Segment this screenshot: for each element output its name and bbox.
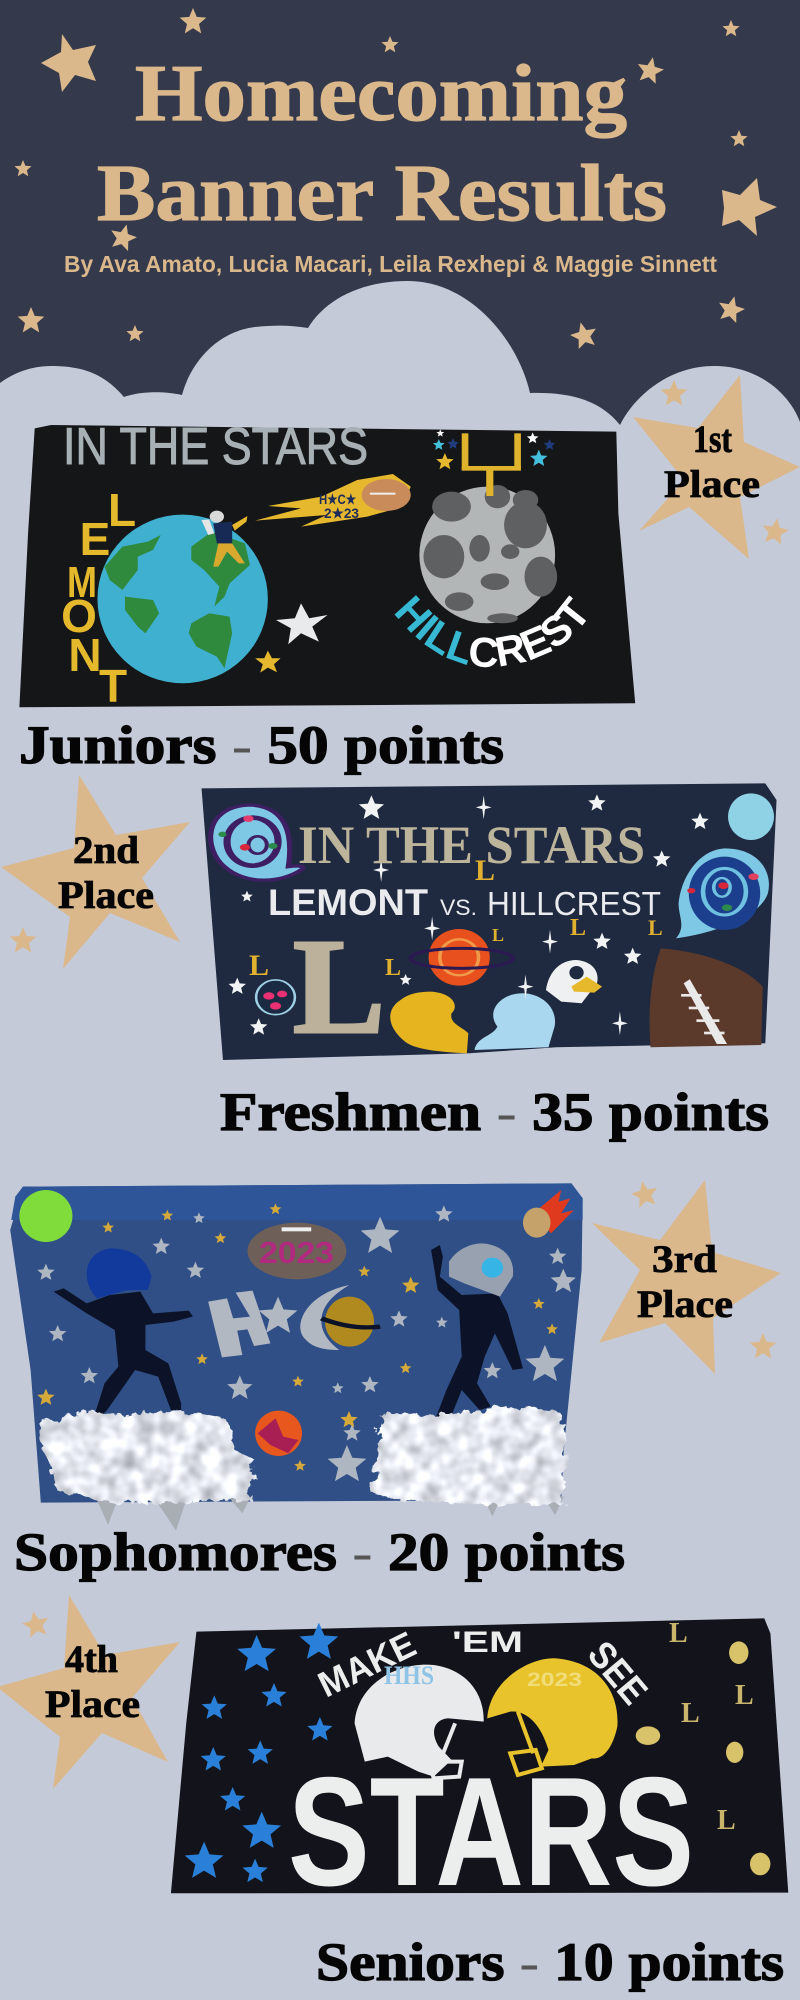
heading: freshmen: Freshmen - 35 points (220, 1082, 769, 1142)
1st place badge: Place (664, 463, 760, 506)
hillcrest curved text (393, 612, 590, 667)
lemont letters: L (108, 484, 136, 536)
goal post (462, 433, 521, 496)
small gold L marks: L (475, 854, 495, 887)
right planet (728, 793, 774, 840)
small gold L marks: L (249, 949, 269, 982)
astronaut player (202, 511, 247, 567)
small gold L marks (249, 854, 663, 982)
banner: juniors: HILLCREST (394, 595, 586, 668)
lemont letters (61, 484, 136, 712)
3rd place badge: 3rd (652, 1238, 717, 1281)
4th place badge: Place (45, 1683, 140, 1726)
lemont letters: N (68, 629, 102, 681)
white stars (229, 794, 709, 1035)
lemont letters: T (99, 660, 127, 712)
laces (282, 1227, 311, 1231)
2nd place badge: 2nd (73, 829, 139, 872)
small gold L marks: L (570, 915, 586, 941)
banner: seniors (171, 1618, 788, 1918)
left player (54, 1248, 193, 1427)
cotton drips (97, 1497, 564, 1531)
comet text: H★C★ (319, 491, 356, 507)
gold L marks: L (717, 1805, 736, 1836)
4th place badge (0, 1595, 180, 1789)
banner: juniors (19, 418, 636, 712)
football corner (650, 948, 763, 1047)
banner: sophomores (10, 1183, 583, 1531)
white helmet (355, 1665, 484, 1778)
2nd place badge (1, 775, 190, 969)
HC logo (208, 1285, 349, 1357)
helmet labels: 2023 (527, 1670, 582, 1691)
right cotton cloud (372, 1408, 566, 1505)
1st place badge: 1st (693, 418, 732, 461)
left galaxy (211, 805, 303, 880)
matchup text: VS. (440, 895, 477, 920)
helmet labels: HHS (384, 1661, 434, 1690)
heading: juniors: Juniors - 50 points (19, 715, 504, 775)
matchup text: HILLCREST (487, 885, 661, 922)
lemont letters: O (61, 590, 97, 642)
heading: seniors: Seniors - 10 points (316, 1932, 784, 1992)
banner slogan: IN THE STARS (63, 418, 368, 476)
lemont letters: M (67, 558, 97, 607)
3rd place badge: Place (637, 1283, 733, 1326)
title (97, 50, 667, 238)
heading: sophomores: Sophomores - 20 points (14, 1522, 625, 1582)
blue helmet (474, 993, 555, 1050)
blue stars (185, 1623, 338, 1882)
ringed planet (321, 1297, 380, 1347)
slogan: make 'em see: MAKE (312, 1623, 422, 1705)
matchup text (268, 882, 661, 923)
stars wordmark: STARS (288, 1745, 694, 1918)
small gold L marks: L (385, 955, 401, 981)
byline: By Ava Amato, Lucia Macari, Leila Rexhepi & Maggie Sinnett (64, 251, 717, 277)
slogan: make 'em see: SEE (579, 1634, 655, 1713)
gold L marks: L (669, 1618, 688, 1649)
pink planet (256, 980, 295, 1015)
gold L marks: L (735, 1680, 754, 1711)
small gold L marks: L (648, 915, 663, 940)
stars (255, 429, 555, 673)
header night sky with cloud edge (0, 0, 800, 425)
gold L marks: L (681, 1698, 700, 1729)
1st place badge (633, 375, 800, 559)
lemont letters: E (80, 513, 110, 565)
2nd place badge: Place (58, 874, 154, 917)
left cotton cloud (36, 1412, 255, 1503)
gold footballs (636, 1641, 770, 1875)
slogan: make 'em see (312, 1623, 655, 1713)
helmet labels (384, 1661, 582, 1691)
yellow helmet (390, 992, 468, 1053)
saturn (411, 929, 513, 986)
comet with football (255, 474, 411, 527)
gold L marks (669, 1618, 754, 1836)
comet text (319, 491, 359, 521)
title: Homecoming (135, 50, 627, 138)
title: Banner Results (97, 150, 667, 238)
banner: freshmen (202, 783, 777, 1062)
slogan: make 'em see: 'EM (452, 1626, 523, 1659)
banner slogan: IN THE STARS (298, 815, 645, 875)
yellow helmet (487, 1658, 618, 1775)
big gothic L: L (293, 912, 385, 1062)
matchup text: LEMONT (268, 882, 428, 923)
green planet (19, 1190, 72, 1242)
right galaxy (676, 848, 769, 938)
comet text: 2★23 (324, 505, 359, 521)
football year: 2023 (259, 1235, 334, 1270)
earth (97, 515, 268, 683)
moon (419, 485, 557, 623)
small gold L marks: L (492, 925, 504, 945)
stars (37, 1203, 576, 1481)
eagle (546, 960, 602, 1003)
football 2023 (247, 1223, 346, 1279)
comet (523, 1190, 574, 1238)
3rd place badge (592, 1179, 781, 1374)
orange planet (255, 1411, 302, 1456)
4th place badge: 4th (65, 1638, 118, 1681)
header stars (14, 8, 777, 350)
right player (431, 1243, 523, 1430)
